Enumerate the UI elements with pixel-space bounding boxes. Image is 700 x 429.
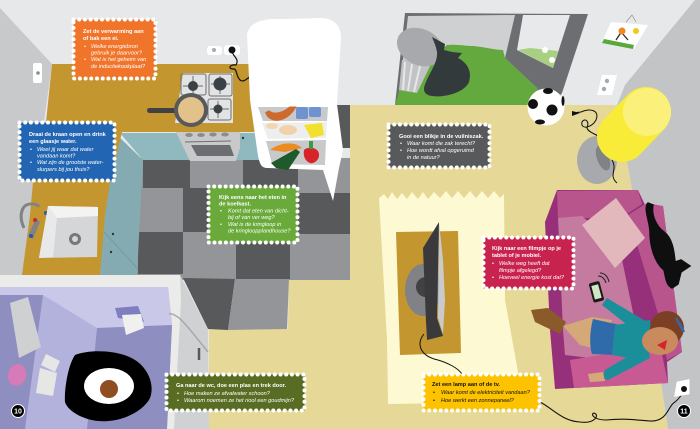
- callout: wc: Hoe maken ze afvalwater schoon?: [184, 391, 271, 397]
- callout: vuilniszak: Gooi een blikje in de vuilniszak.: [399, 134, 484, 140]
- toilet paper: [115, 306, 144, 335]
- sink: [21, 204, 98, 258]
- towel: [10, 297, 41, 358]
- callout: kraan: vandaan komt?: [37, 154, 76, 160]
- lamp: [572, 88, 671, 184]
- page number 11: [678, 404, 690, 418]
- page number 11: 11: [680, 408, 688, 416]
- callout: lamp en tv: •: [433, 398, 435, 404]
- callout: verwarming: Wat is het geheim van: [91, 57, 146, 63]
- callout: wc: •: [177, 398, 179, 404]
- drawing on wall: [602, 15, 648, 49]
- callout: verwarming: Zet de verwarming aan: [83, 29, 144, 35]
- toilet: [65, 351, 152, 421]
- callout: vuilniszak: •: [400, 148, 402, 154]
- callout: koelkast: Kijk eens naar het eten in: [219, 195, 287, 201]
- wall sockets: [33, 45, 617, 95]
- trash can: [391, 21, 449, 93]
- back door: [395, 13, 588, 105]
- callout: kraan: Weet jij waar dat water: [37, 147, 95, 153]
- pillow: [582, 198, 645, 268]
- floor socket: [676, 381, 688, 395]
- callout: vuilniszak: •: [400, 141, 402, 147]
- lamp cord along floor: [540, 390, 684, 422]
- callout: filmpje: Hoeveel energie kost dat?: [499, 275, 565, 281]
- callout: kraan: •: [30, 160, 32, 166]
- kitchen counter: [22, 64, 258, 275]
- rug: [379, 191, 522, 404]
- callout: lamp en tv: Waar komt de elektriciteit vandaan?: [441, 390, 531, 396]
- football: [528, 88, 564, 126]
- pink soap: [5, 362, 29, 388]
- callout: filmpje: •: [492, 275, 494, 281]
- tv cord: [420, 334, 462, 374]
- callout: kraan: Draai de kraan open en drink: [29, 132, 107, 138]
- oven: [176, 132, 240, 161]
- callout: vuilniszak: Hoe wordt afval opgeruimd: [407, 148, 475, 154]
- folded cloths: [36, 354, 60, 396]
- towel rail and pipe: [169, 314, 208, 360]
- right wall: [617, 0, 700, 429]
- callout: kraan: een glaasje water.: [29, 139, 77, 145]
- bathroom walls: [0, 275, 209, 429]
- callout: vuilniszak: Waar komt die zak terecht?: [407, 141, 476, 147]
- callout: koelkast: •: [220, 208, 222, 214]
- garbage bag: [424, 37, 470, 96]
- callout: koelkast: de kringloopplandhouse?: [228, 228, 291, 234]
- bathroom floor: [0, 287, 172, 429]
- callout: koelkast: Komt dat eten van dicht-: [228, 208, 289, 214]
- tv table: [396, 231, 461, 355]
- callout: verwarming: [74, 20, 156, 78]
- callout: wc: •: [177, 391, 179, 397]
- callout: lamp en tv: [424, 374, 540, 410]
- yellow floor: [209, 105, 668, 429]
- callout: kraan: Wat zijn de grootste water-: [37, 160, 103, 166]
- checkerboard kitchen floor: [136, 105, 350, 330]
- fridge power cord: [230, 50, 250, 81]
- callout: koelkast: [208, 186, 298, 242]
- callout: vuilniszak: in de natuur?: [407, 155, 441, 161]
- open fridge: [247, 18, 343, 201]
- callout: koelkast: bij of van ver weg?: [228, 215, 276, 221]
- callout: wc: [166, 374, 304, 410]
- left wall: [0, 8, 52, 280]
- page number 10: 10: [14, 408, 22, 416]
- person on sofa: [531, 298, 684, 382]
- callout: verwarming: Welke energiebron: [91, 44, 138, 50]
- callout: koelkast: Wat is de kringloop in: [228, 222, 281, 228]
- callout: filmpje: Welke weg heeft dat: [499, 261, 550, 267]
- callout: lamp en tv: Hoe werkt een zonnepaneel?: [441, 398, 515, 404]
- callout: verwarming: de inductiekookplaat?: [91, 64, 146, 70]
- callout: kraan: slurpers bij jou thuis?: [37, 167, 90, 173]
- callout: kraan: •: [30, 147, 32, 153]
- black cat: [646, 203, 690, 288]
- phone with wifi icon: [589, 273, 609, 303]
- callout: koelkast: •: [220, 222, 222, 228]
- callout: filmpje: tablet of je mobiel.: [492, 253, 542, 259]
- callout: verwarming: gebruik je daarvoor?: [91, 50, 143, 56]
- callout: filmpje: filmpje afgelegd?: [499, 268, 542, 274]
- stove and burners: [175, 73, 233, 123]
- callout: kraan: [20, 122, 114, 180]
- frying pan: [147, 93, 208, 127]
- callout: vuilniszak: [388, 124, 490, 168]
- callout: filmpje: •: [492, 261, 494, 267]
- kitchen cabinets: [100, 133, 265, 275]
- callout: lamp en tv: Zet een lamp aan of de tv.: [432, 382, 500, 388]
- callout: lamp en tv: •: [433, 390, 435, 396]
- callout: wc: Ga naar de wc, doe een plas en trek door.: [176, 383, 286, 389]
- callout: filmpje: [484, 238, 574, 288]
- callout: wc: Waarom noemen ze het riool een goudmijn?: [184, 398, 295, 404]
- callout: verwarming: of bak een ei.: [83, 36, 119, 42]
- television: [405, 222, 445, 340]
- sofa: [545, 190, 682, 389]
- callout: filmpje: Kijk naar een filmpje op je: [492, 246, 561, 252]
- callout: verwarming: •: [84, 44, 86, 50]
- page number 10: [12, 404, 24, 418]
- callout: verwarming: •: [84, 57, 86, 63]
- plug: [228, 46, 236, 54]
- callout: koelkast: de koelkast.: [219, 202, 251, 208]
